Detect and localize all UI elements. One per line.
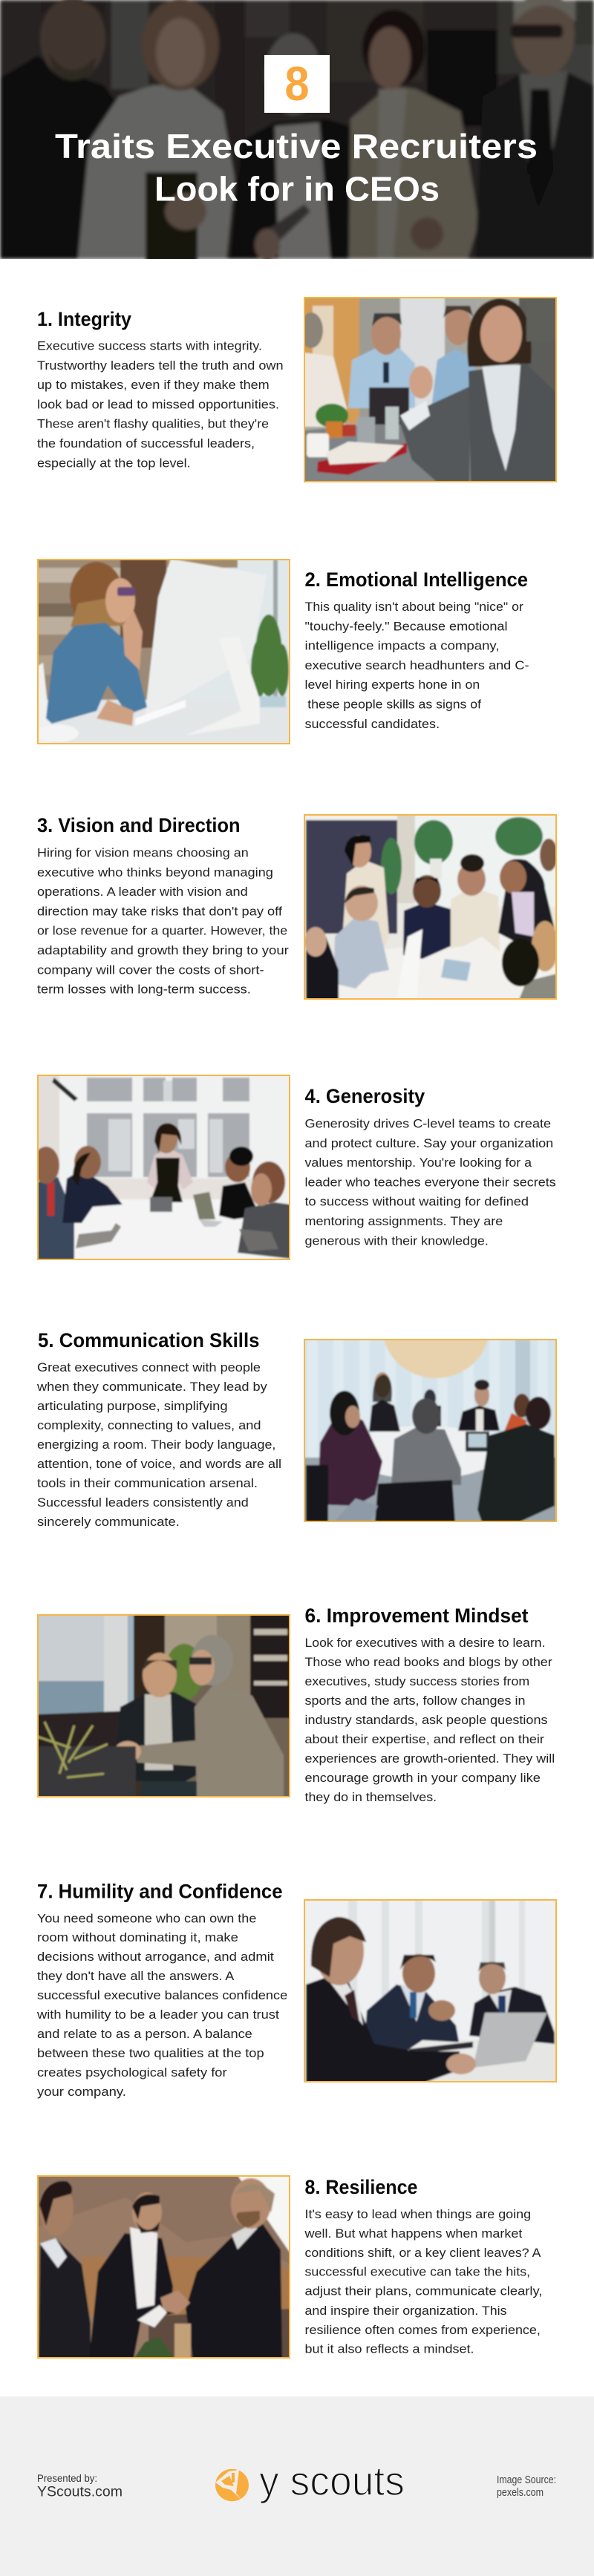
photo border — [304, 1340, 556, 1521]
text block: Emotional Intelligence: intelligence impacts a company, — [304, 639, 499, 653]
text block: Humility and Confidence: decisions without arrogance, and admit — [37, 1950, 274, 1964]
image source: Image Source: — [497, 2474, 556, 2486]
logo: y scouts — [215, 2457, 405, 2504]
photo border — [304, 815, 556, 999]
panel: 5. Communication Skills — [36, 1277, 557, 1529]
header banner — [0, 0, 594, 261]
photo: three men in suits at laptop — [305, 1901, 555, 2081]
text block: Improvement Mindset: Those who read books and blogs by other — [304, 1655, 552, 1669]
text block: Communication Skills: when they communicate. They lead by — [36, 1380, 267, 1394]
text block: Vision and Direction: direction may take risks that don't pay off — [37, 904, 282, 918]
heading: Vision and Direction: 3. Vision and Direction — [37, 814, 241, 836]
text block: Resilience: and inspire their organization. This — [304, 2304, 506, 2318]
text block: Communication Skills: attention, tone of voice, and words are all — [37, 1457, 281, 1471]
text block: Generosity: leader who teaches everyone their secrets — [304, 1175, 556, 1189]
text block: Improvement Mindset: Look for executives with a desire to learn. — [304, 1636, 545, 1650]
text block: Improvement Mindset: they do in themselves. — [304, 1790, 437, 1804]
photo border — [38, 560, 290, 744]
photo: businesswoman at meeting — [305, 298, 555, 481]
text block: Emotional Intelligence: This quality isn't about being "nice" or — [304, 600, 523, 614]
text block: Improvement Mindset: industry standards, ask people questions — [304, 1713, 548, 1727]
panel: 7. Humility and Confidence — [36, 1881, 557, 2099]
text block: Emotional Intelligence: executive search headhunters and C- — [304, 658, 529, 672]
text block: Improvement Mindset: encourage growth in your company like — [304, 1771, 541, 1785]
woman 4 — [349, 85, 479, 259]
heading: Improvement Mindset: 6. Improvement Mindset — [304, 1605, 529, 1627]
text block: Integrity: up to mistakes, even if they make them — [37, 378, 270, 392]
heading: Integrity: 1. Integrity — [37, 308, 131, 330]
text block: Humility and Confidence: with humility to be a leader you can trust — [36, 2008, 279, 2022]
text block: Vision and Direction: company will cover the costs of short- — [37, 963, 264, 977]
presented by: Presented by: — [37, 2472, 97, 2484]
photo border — [38, 1615, 290, 1797]
text block: Improvement Mindset: executives, study success stories from — [304, 1674, 529, 1688]
text block: Emotional Intelligence: successful candidates. — [304, 717, 440, 731]
text block: Humility and Confidence: creates psychological safety for — [37, 2065, 227, 2080]
text block: Improvement Mindset: about their expertise, and reflect on their — [304, 1732, 544, 1746]
text block: Integrity: the foundation of successful leaders, — [37, 436, 255, 450]
man 5 — [475, 71, 594, 259]
photo: woman at desktop computer — [39, 560, 289, 743]
text block: Resilience: adjust their plans, communicate clearly, — [304, 2284, 542, 2298]
text block: Resilience: It's easy to lead when things are going — [304, 2207, 531, 2221]
text block: Communication Skills: sincerely communicate. — [37, 1515, 180, 1529]
text block: Generosity: generous with their knowledge. — [304, 1233, 489, 1248]
text block: Communication Skills: Great executives connect with people — [37, 1360, 261, 1374]
text block: Generosity: to success without waiting for defined — [304, 1195, 529, 1209]
panel: 6. Improvement Mindset — [37, 1605, 555, 1804]
heading: Humility and Confidence: 7. Humility and Confidence — [37, 1881, 283, 1903]
number badge: 8 — [285, 56, 309, 111]
text block: Humility and Confidence: room without dominating it, make — [37, 1930, 238, 1944]
photo border — [38, 1075, 290, 1259]
text block: Communication Skills: tools in their communication arsenal. — [37, 1476, 258, 1490]
woman 3 center — [230, 119, 379, 259]
panel: 1. Integrity — [37, 297, 557, 482]
heading: Communication Skills: 5. Communication Skills — [38, 1329, 260, 1351]
title: Look for in CEOs — [154, 169, 440, 208]
image source — [497, 2474, 556, 2499]
photo border — [38, 2176, 290, 2358]
text block: Humility and Confidence: successful executive balances confidence — [37, 1988, 287, 2002]
text block: Vision and Direction — [37, 846, 289, 997]
text block: Improvement Mindset — [304, 1636, 555, 1804]
text block: Humility and Confidence: they don't have all the answers. A — [37, 1969, 235, 1983]
text block: Resilience: successful executive can take the hits, — [304, 2265, 530, 2279]
heading: Resilience: 8. Resilience — [304, 2176, 417, 2198]
text block: Integrity: Trustworthy leaders tell the truth and own — [37, 358, 284, 373]
text block: Vision and Direction: adaptability and growth they bring to your — [37, 943, 289, 957]
photo: woman presenting in bright boardroom — [39, 1076, 289, 1259]
panel: 3. Vision and Direction — [37, 814, 558, 1000]
text block: Humility and Confidence: between these two qualities at the top — [37, 2046, 264, 2060]
title: Traits Executive Recruiters — [55, 127, 538, 165]
text block: Resilience: but it also reflects a mindset. — [304, 2342, 474, 2356]
text block: Humility and Confidence: You need someone who can own the — [37, 1911, 256, 1925]
photo: handshake between businessmen — [39, 2177, 289, 2357]
text block: Vision and Direction: term losses with long-term success. — [37, 983, 251, 997]
text block: Resilience: well. But what happens when market — [304, 2226, 523, 2241]
footer — [0, 2396, 594, 2576]
title — [55, 127, 538, 208]
text block: Vision and Direction: operations. A leader with vision and — [37, 885, 248, 899]
panel: 2. Emotional Intelligence — [37, 559, 529, 744]
icon: orange compass circle — [215, 2469, 249, 2501]
text block: Integrity: look bad or lead to missed opportunities. — [37, 397, 279, 411]
woman 2 — [78, 85, 235, 259]
text block: Integrity: especially at the top level. — [37, 456, 191, 470]
photo border — [304, 298, 556, 482]
text block: Generosity: Generosity drives C-level teams to create — [304, 1116, 551, 1131]
text block: Improvement Mindset: experiences are growth-oriented. They will — [304, 1751, 555, 1766]
text block: Resilience: resilience often comes from experience, — [304, 2323, 541, 2337]
text block: Generosity — [304, 1116, 556, 1248]
text block: Communication Skills: energizing a room. Their body language, — [37, 1438, 275, 1452]
text block: Resilience: conditions shift, or a key client leaves? A — [304, 2246, 541, 2260]
text block: Integrity — [37, 338, 284, 470]
text block: Communication Skills: Successful leaders consistently and — [37, 1495, 249, 1510]
text block: Communication Skills — [36, 1360, 281, 1529]
text block: Generosity: mentoring assignments. They are — [304, 1214, 503, 1228]
photo: round-table meeting under lantern — [305, 1340, 555, 1521]
presented by — [37, 2472, 123, 2500]
heading: Emotional Intelligence: 2. Emotional Intelligence — [304, 568, 528, 591]
text block: Generosity: and protect culture. Say your organization — [304, 1136, 553, 1150]
text block: Improvement Mindset: sports and the arts, follow changes in — [304, 1694, 526, 1708]
photo border — [304, 1900, 556, 2082]
image source: pexels.com — [497, 2487, 544, 2499]
text block: Emotional Intelligence — [304, 600, 529, 731]
text block: Integrity: These aren't flashy qualities, but they're — [37, 417, 269, 431]
text block: Communication Skills: articulating purpose, simplifying — [37, 1399, 228, 1413]
photo: team around white table — [305, 816, 555, 998]
header photo: five executives, darkened — [0, 0, 594, 259]
heading: Generosity: 4. Generosity — [304, 1085, 425, 1107]
presented by: YScouts.com — [37, 2485, 123, 2500]
text block: Emotional Intelligence: these people skills as signs of — [307, 698, 481, 711]
text block: Emotional Intelligence: "touchy-feely." Because emotional — [304, 619, 508, 633]
text block: Resilience — [304, 2207, 542, 2356]
text block: Emotional Intelligence: level hiring experts hone in on — [304, 678, 480, 692]
panel: 4. Generosity — [33, 1075, 556, 1260]
text block: Vision and Direction: Hiring for vision means choosing an — [37, 846, 249, 859]
text block: Vision and Direction: executive who thinks beyond managing — [37, 865, 273, 879]
text block: Vision and Direction: or lose revenue for a quarter. However, the — [37, 924, 287, 938]
text block: Integrity: Executive success starts with integrity. — [37, 338, 262, 353]
number badge — [264, 55, 330, 113]
text block: Communication Skills: complexity, connecting to values, and — [37, 1418, 261, 1432]
man 1 — [0, 56, 120, 259]
text block: Generosity: values mentorship. You're looking for a — [304, 1156, 532, 1170]
text block: Humility and Confidence: and relate to as a person. A balance — [37, 2027, 252, 2041]
photo: two colleagues at laptop by window — [39, 1616, 289, 1796]
text block: Humility and Confidence: your company. — [37, 2085, 126, 2099]
wordmark: y scouts — [259, 2457, 405, 2504]
panel: 8. Resilience — [37, 2175, 542, 2359]
text block: Humility and Confidence — [36, 1911, 287, 2099]
